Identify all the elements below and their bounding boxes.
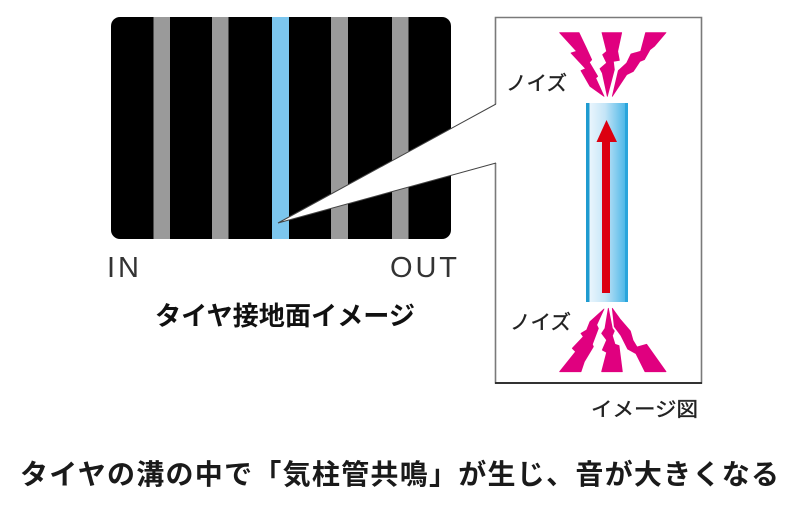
callout panel frame (496, 18, 702, 383)
icon: noise bolts bottom (560, 308, 666, 372)
arrow: airflow (596, 120, 617, 293)
groove 5 (392, 17, 408, 239)
label: noise bottom: ノイズ (510, 311, 571, 334)
panel bottom edge (495, 382, 702, 384)
tube right wall (625, 103, 628, 302)
label: IN: IN (107, 252, 139, 284)
highlighted groove (272, 17, 289, 239)
groove 4 (331, 17, 348, 239)
caption: image figure: イメージ図 (591, 399, 698, 421)
tube (586, 103, 628, 302)
icon: noise bolts top (560, 33, 666, 96)
callout pointer (278, 104, 496, 223)
groove 2 (212, 17, 228, 239)
tyre contact patch (111, 17, 451, 239)
tube left wall (586, 103, 590, 302)
label: OUT: OUT (390, 252, 457, 284)
headline: タイヤの溝の中で「気柱管共鳴」が生じ、音が大きくなる (20, 458, 779, 490)
groove 1 (154, 17, 170, 239)
caption: contact patch: タイヤ接地面イメージ (155, 301, 415, 331)
callout pointer edges (278, 104, 496, 223)
label: noise top: ノイズ (506, 72, 567, 95)
